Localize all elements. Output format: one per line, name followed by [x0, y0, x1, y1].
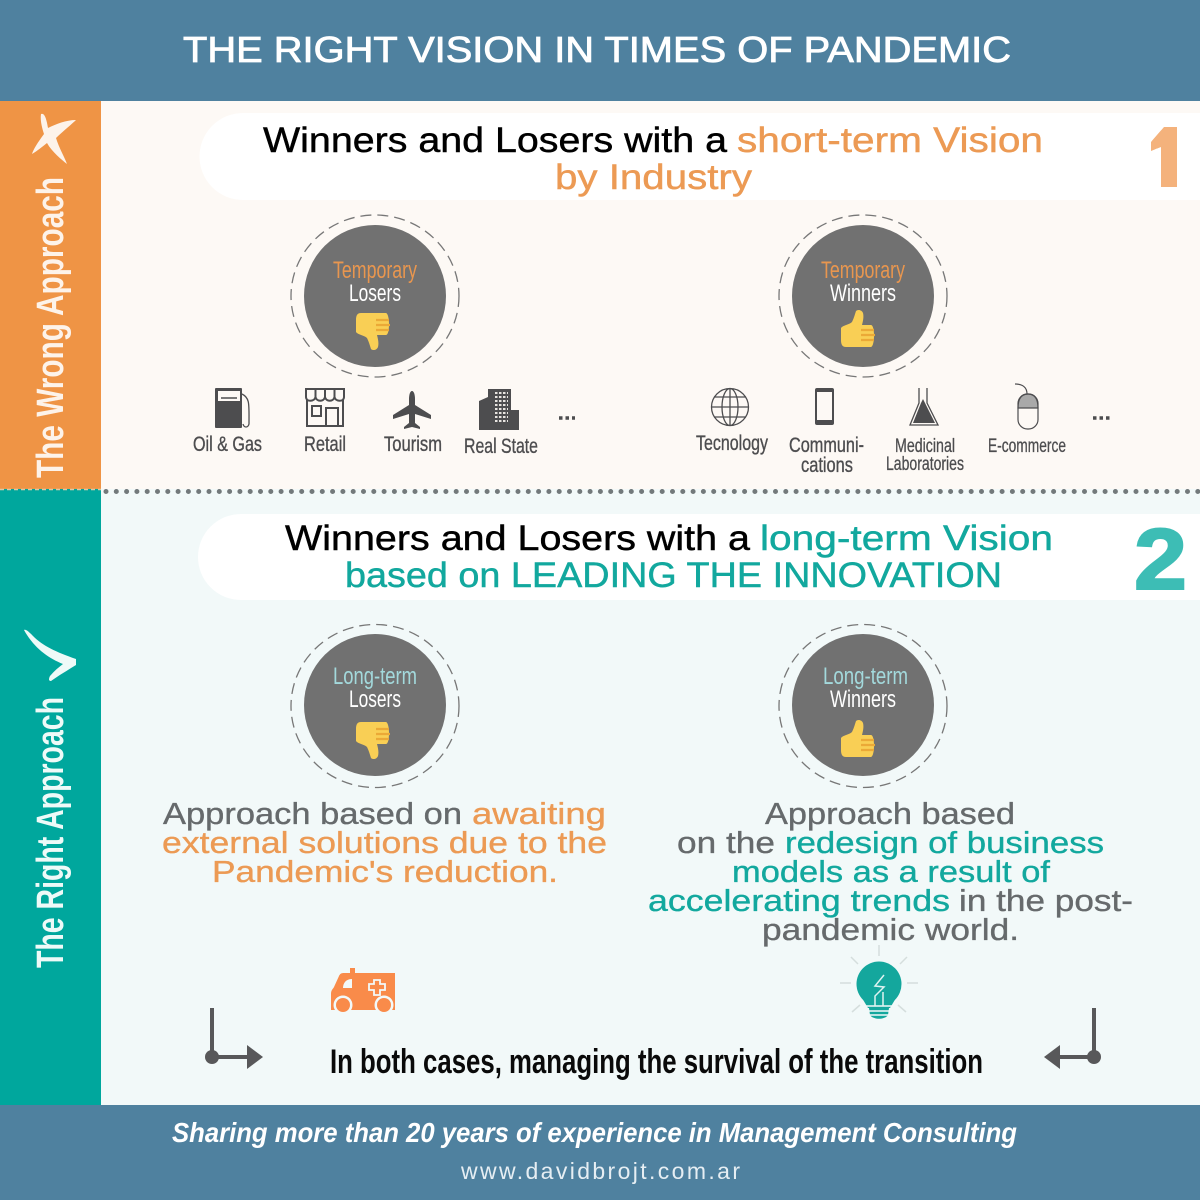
text block: winners approach: redesign of business [785, 825, 1104, 860]
label: medicinal laboratories [886, 436, 964, 475]
icon: thumbs up [841, 310, 875, 347]
icon: computer mouse [1015, 384, 1038, 429]
icon: check mark [24, 630, 76, 681]
icon: thumbs down [356, 722, 390, 759]
section 2 heading pill: Winners and Losers with a [285, 519, 751, 558]
circle: long-term winners [779, 624, 947, 788]
arrow: right elbow [1044, 1008, 1101, 1069]
icon: globe [712, 388, 748, 426]
icon: light bulb [840, 945, 918, 1019]
footer band [0, 1105, 1200, 1200]
sidebar label: right approach: The Right Approach [30, 697, 72, 968]
circle: temporary winners [779, 215, 947, 377]
text block: losers approach: Approach based on [163, 796, 462, 831]
footer tagline: Sharing more than 20 years of experience in Management Consulting [172, 1117, 1017, 1148]
section 1 heading pill [200, 113, 1200, 200]
text block: losers approach [162, 796, 607, 889]
panel: wrong approach background [101, 101, 1200, 489]
circle: long-term winners: Long-term [823, 663, 908, 690]
section 2 heading pill: long-term Vision [760, 519, 1053, 558]
label: oil and gas: Oil & Gas [193, 433, 262, 456]
circle: long-term losers: Losers [349, 686, 401, 713]
header band [0, 0, 1200, 101]
text block: winners approach [648, 796, 1133, 947]
section 2 heading pill [198, 514, 1200, 600]
icon: lab flask [910, 388, 938, 425]
circle: temporary losers [291, 215, 459, 377]
circle: temporary winners: Temporary [821, 257, 905, 284]
label: real state: Real State [464, 435, 538, 458]
icon: office building [479, 389, 519, 430]
number 1: 1 [1138, 110, 1192, 217]
label: technology: Tecnology [696, 432, 768, 455]
label: tourism: Tourism [384, 433, 442, 456]
label: communications: Communi- [789, 434, 864, 457]
text block: winners approach: in the post- [959, 883, 1133, 918]
text block: winners approach: accelerating trends [648, 883, 950, 918]
panel: right approach background [101, 489, 1200, 1105]
icon: smartphone [815, 388, 834, 425]
text block: losers approach: external solutions due to the [162, 825, 607, 860]
label: retail: Retail [304, 433, 346, 456]
label: communications [789, 434, 864, 477]
ellipsis [559, 416, 575, 420]
text block: losers approach: awaiting [472, 796, 606, 831]
label: medicinal laboratories: Medicinal [895, 436, 955, 457]
text block: winners approach: Approach based [765, 796, 1015, 831]
icon: gas pump [215, 388, 249, 428]
icon: ambulance [331, 968, 395, 1014]
circle: long-term losers [291, 624, 459, 788]
arrow: left elbow [205, 1008, 263, 1069]
text block: winners approach: models as a result of [732, 854, 1050, 889]
label: communications: cations [801, 454, 853, 477]
label: medicinal laboratories: Laboratories [886, 454, 964, 475]
icon: thumbs up [841, 720, 875, 757]
circle: long-term losers: Long-term [333, 663, 417, 690]
circle: temporary losers: Temporary [333, 257, 417, 284]
section 1 heading pill: by Industry [555, 158, 753, 197]
section 1 heading pill: Winners and Losers with a [263, 121, 728, 160]
icon: cross mark [32, 114, 76, 164]
label: e-commerce: E-commerce [988, 436, 1066, 457]
text block: winners approach: pandemic world. [762, 912, 1019, 947]
sidebar: the right approach [0, 489, 101, 1105]
number 2: 2 [1134, 512, 1187, 608]
sidebar: the wrong approach [0, 101, 101, 489]
section 1 heading pill: short-term Vision [737, 121, 1043, 160]
circle: temporary losers: Losers [349, 280, 401, 307]
circle: temporary winners: Winners [830, 280, 896, 307]
section 2 heading pill: based on LEADING THE INNOVATION [345, 556, 1002, 595]
circle: long-term winners: Winners [830, 686, 896, 713]
title: THE RIGHT VISION IN TIMES OF PANDEMIC [183, 29, 1011, 70]
callout: conclusion: In both cases, managing the survival of the transition [330, 1043, 983, 1081]
text block: losers approach: Pandemic's reduction. [212, 854, 558, 889]
sidebar label: wrong approach: The Wrong Approach [30, 177, 72, 478]
icon: thumbs down [356, 313, 390, 350]
text block: winners approach: on the [677, 825, 775, 860]
icon: retail store [306, 389, 344, 426]
ellipsis [1093, 416, 1110, 420]
footer url: www.davidbrojt.com.ar [460, 1158, 740, 1184]
icon: airplane [393, 391, 431, 429]
